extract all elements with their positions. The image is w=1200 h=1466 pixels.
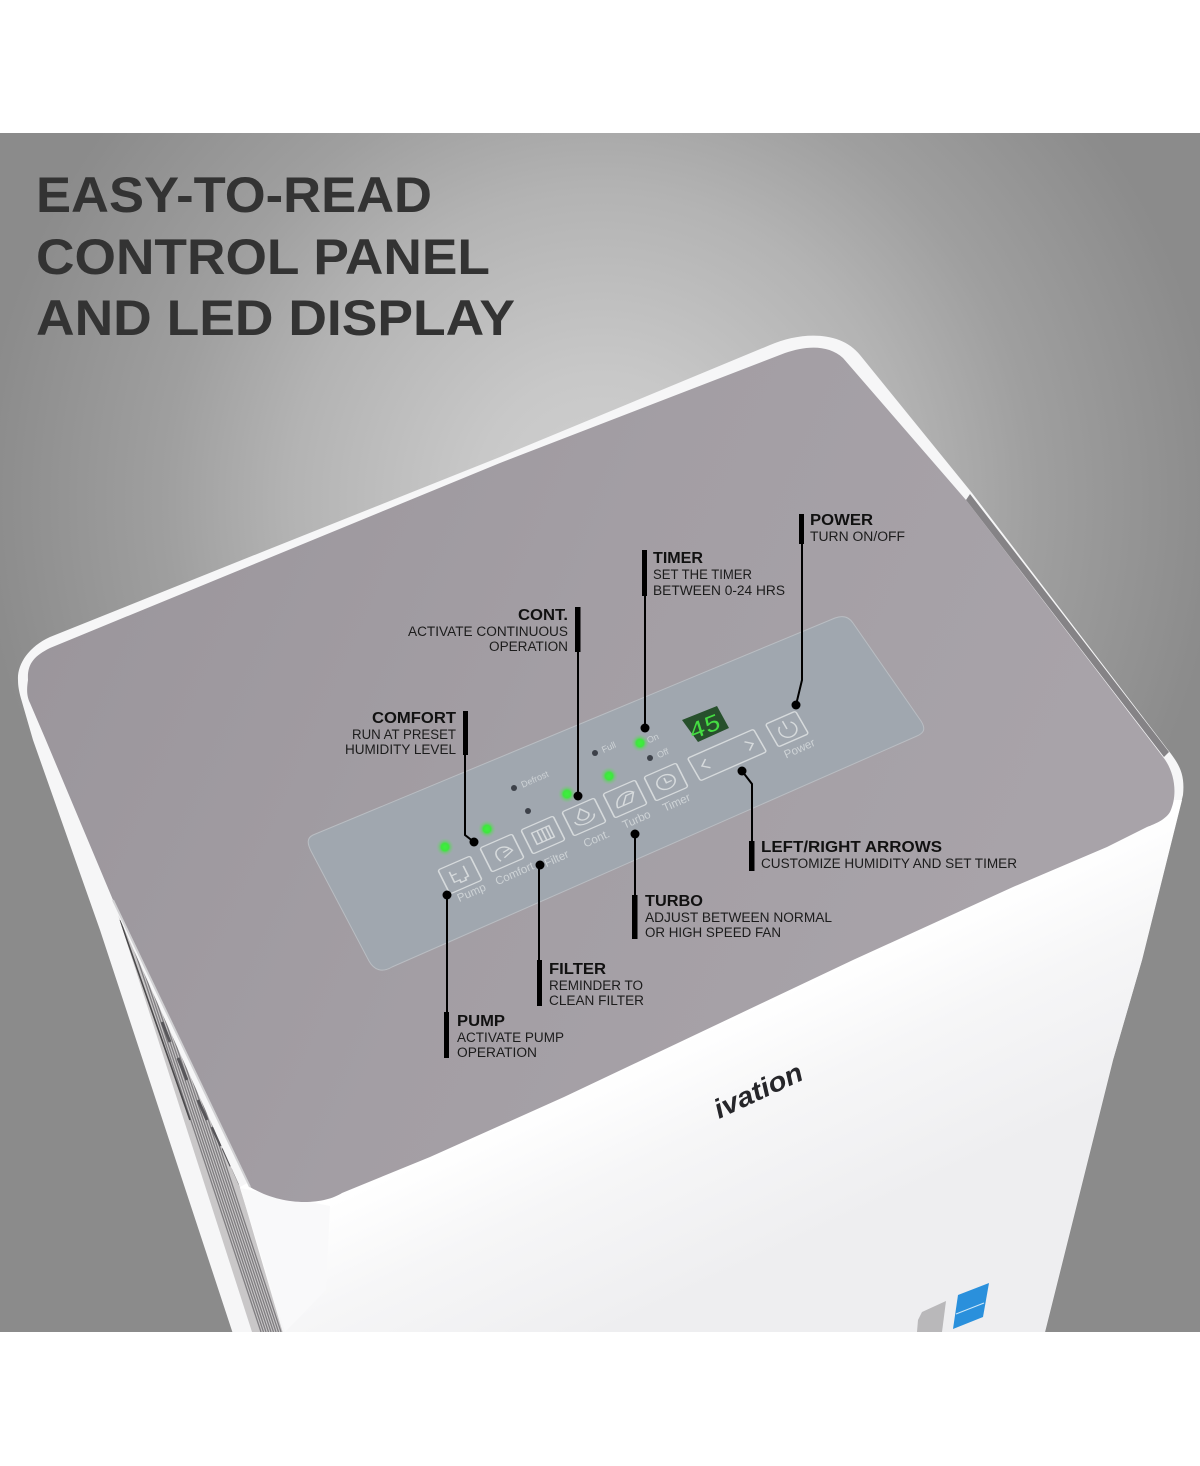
callout: left/right arrows: CUSTOMIZE HUMIDITY AND SET TIMER [761,856,1017,871]
button labels: Off [655,746,671,760]
callout: turbo: TURBO [645,893,703,910]
button labels: Cont. [582,828,612,850]
icon: energy star badge [953,1283,989,1329]
title: AND LED DISPLAY [36,290,515,346]
callout: cont: CONT. [518,607,568,624]
callout: filter: REMINDER TO [549,978,643,993]
callout: pump: OPERATION [457,1045,537,1060]
button labels: On [645,731,660,745]
side air intake grille [118,916,282,1332]
grey rear strip on lid edge [966,494,1169,757]
logo: ivation: ivation [709,1057,808,1124]
title [36,167,515,346]
callout: filter: FILTER [549,961,606,978]
button: comfort [480,834,524,872]
callout: power [792,512,905,710]
button: timer [644,763,688,801]
button: pump [438,856,482,894]
button: power [766,711,808,747]
button labels: Turbo [621,809,653,832]
callout: turbo: ADJUST BETWEEN NORMAL [645,910,832,925]
button labels: Timer [661,792,693,815]
button labels: Comfort [494,860,537,888]
callout: cont: ACTIVATE CONTINUOUS [408,624,568,639]
control glass panel [308,617,924,970]
callout: comfort: COMFORT [372,710,456,727]
indicator dots: dark [511,750,653,814]
button labels: Filter [543,849,571,870]
callout: filter [536,860,644,1008]
LED display reading 45: 45 [686,709,724,747]
callout: cont: OPERATION [489,639,568,654]
LED display reading 45 [682,706,729,742]
callout: power: TURN ON/OFF [810,529,905,544]
silver label [917,1301,946,1332]
button: cont [562,798,606,836]
body shell with white trim [18,336,1183,1340]
callout: power: POWER [810,512,873,529]
button: turbo [603,780,647,818]
button: filter [521,816,565,854]
button labels: Full [600,740,617,755]
callout: comfort: RUN AT PRESET [352,727,456,742]
callout: turbo: OR HIGH SPEED FAN [645,925,781,940]
lid top surface [27,348,1174,1202]
callout: left/right arrows [738,766,1017,871]
button labels [456,731,817,905]
callout: pump [442,890,564,1060]
callout: timer: SET THE TIMER [653,567,752,582]
title: CONTROL PANEL [36,229,490,285]
callout: comfort: HUMIDITY LEVEL [345,742,456,757]
button: arrows [688,729,766,781]
callout: filter: CLEAN FILTER [549,993,644,1008]
callout: timer [640,550,785,732]
button labels: Pump [456,882,488,905]
front face [240,800,1182,1340]
indicator LEDs: green [436,734,649,856]
dehumidifier product [18,336,1183,1340]
front body highlight by grille [240,1188,246,1207]
callout: comfort [345,710,478,846]
lid edge highlight [113,900,250,1187]
button labels: Defrost [519,769,551,790]
callout: pump: PUMP [457,1013,505,1030]
callout: left/right arrows: LEFT/RIGHT ARROWS [761,839,942,856]
button labels: Power [782,737,817,761]
callout: cont [408,607,582,800]
callout: pump: ACTIVATE PUMP [457,1030,564,1045]
callout: timer: BETWEEN 0-24 HRS [653,583,785,598]
title: EASY-TO-READ [36,167,432,223]
callout: turbo [630,830,832,940]
callout: timer: TIMER [653,550,703,567]
